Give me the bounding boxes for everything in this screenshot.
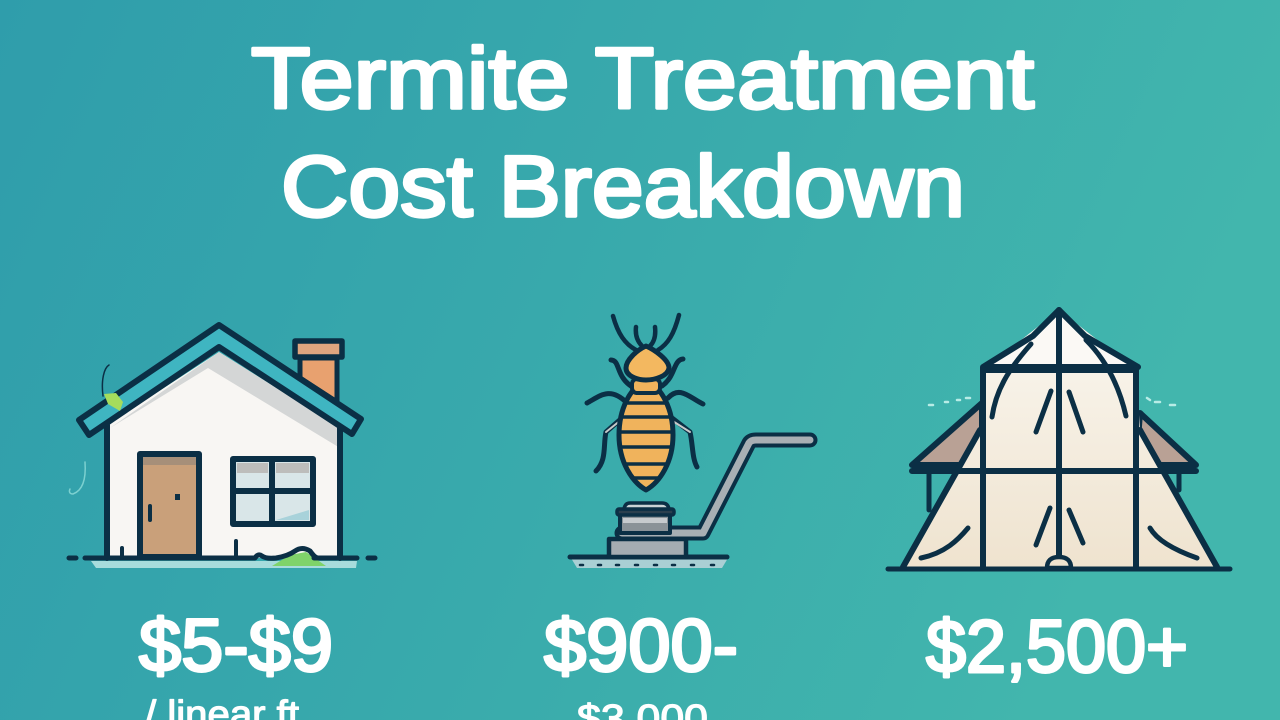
icon: floor treatment machine — [570, 440, 810, 568]
price: localized treatment — [544, 604, 738, 720]
title: Termite Treatment — [251, 31, 1034, 127]
price: linear foot: $5-$9 — [139, 604, 333, 687]
icon: termite — [587, 315, 703, 490]
title: Cost Breakdown — [281, 139, 965, 235]
icon: fumigation tent — [888, 310, 1230, 569]
price: localized treatment: $900- — [544, 604, 738, 687]
price: linear foot — [139, 604, 333, 720]
price: fumigation: $2,500+ — [926, 605, 1188, 688]
title — [251, 31, 1034, 235]
icon: house — [69, 325, 375, 568]
